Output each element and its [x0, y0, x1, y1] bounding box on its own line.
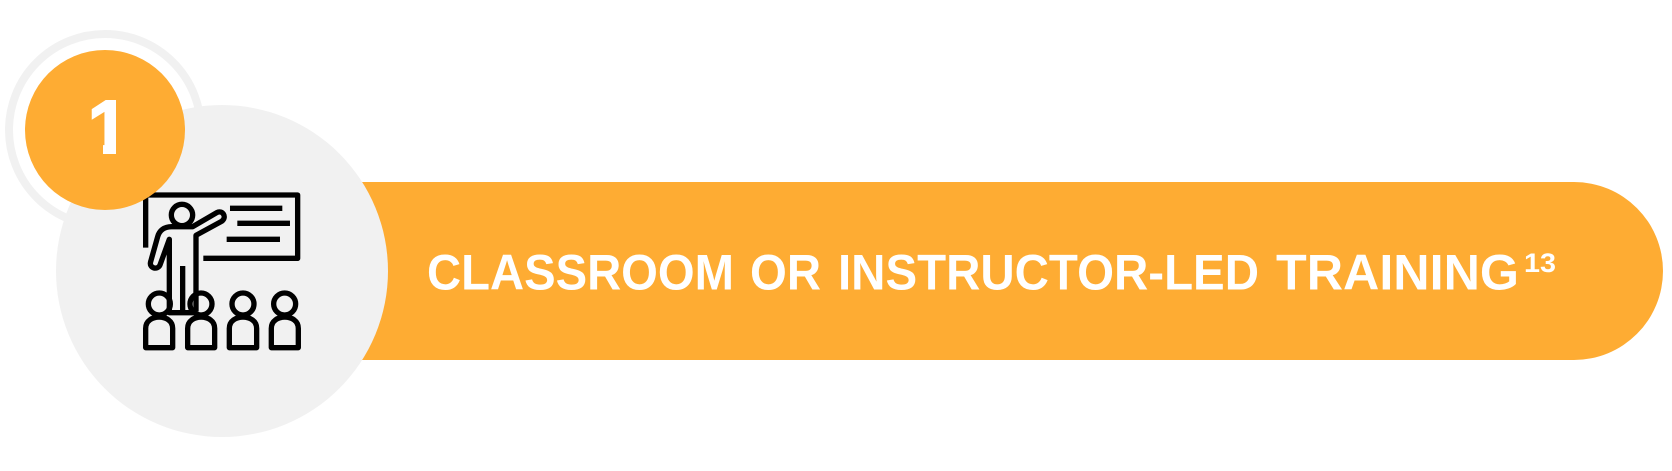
orange number badge — [25, 50, 185, 210]
footnote superscript: 13 — [1524, 248, 1556, 278]
icon: presentation board — [146, 195, 298, 258]
icon: audience member 1 — [146, 293, 173, 348]
banner title: TRAINING — [1276, 244, 1519, 300]
icon: instructor teaching a class — [146, 195, 298, 348]
banner title: CLASSROOM — [427, 244, 734, 300]
icon: audience member 3 — [229, 293, 257, 348]
step number: 1 — [88, 85, 130, 171]
large grey icon circle — [56, 105, 388, 437]
icon: board text lines — [227, 208, 290, 239]
banner title: INSTRUCTOR-LED — [838, 244, 1259, 300]
icon: instructor head — [171, 204, 193, 226]
outer ring around number badge — [9, 34, 201, 226]
banner title: OR — [750, 244, 821, 300]
icon: instructor body — [150, 212, 224, 313]
orange title banner — [300, 182, 1663, 360]
icon: audience member 4 — [271, 293, 298, 348]
icon: audience member 2 — [188, 293, 215, 348]
banner title — [427, 244, 1519, 300]
